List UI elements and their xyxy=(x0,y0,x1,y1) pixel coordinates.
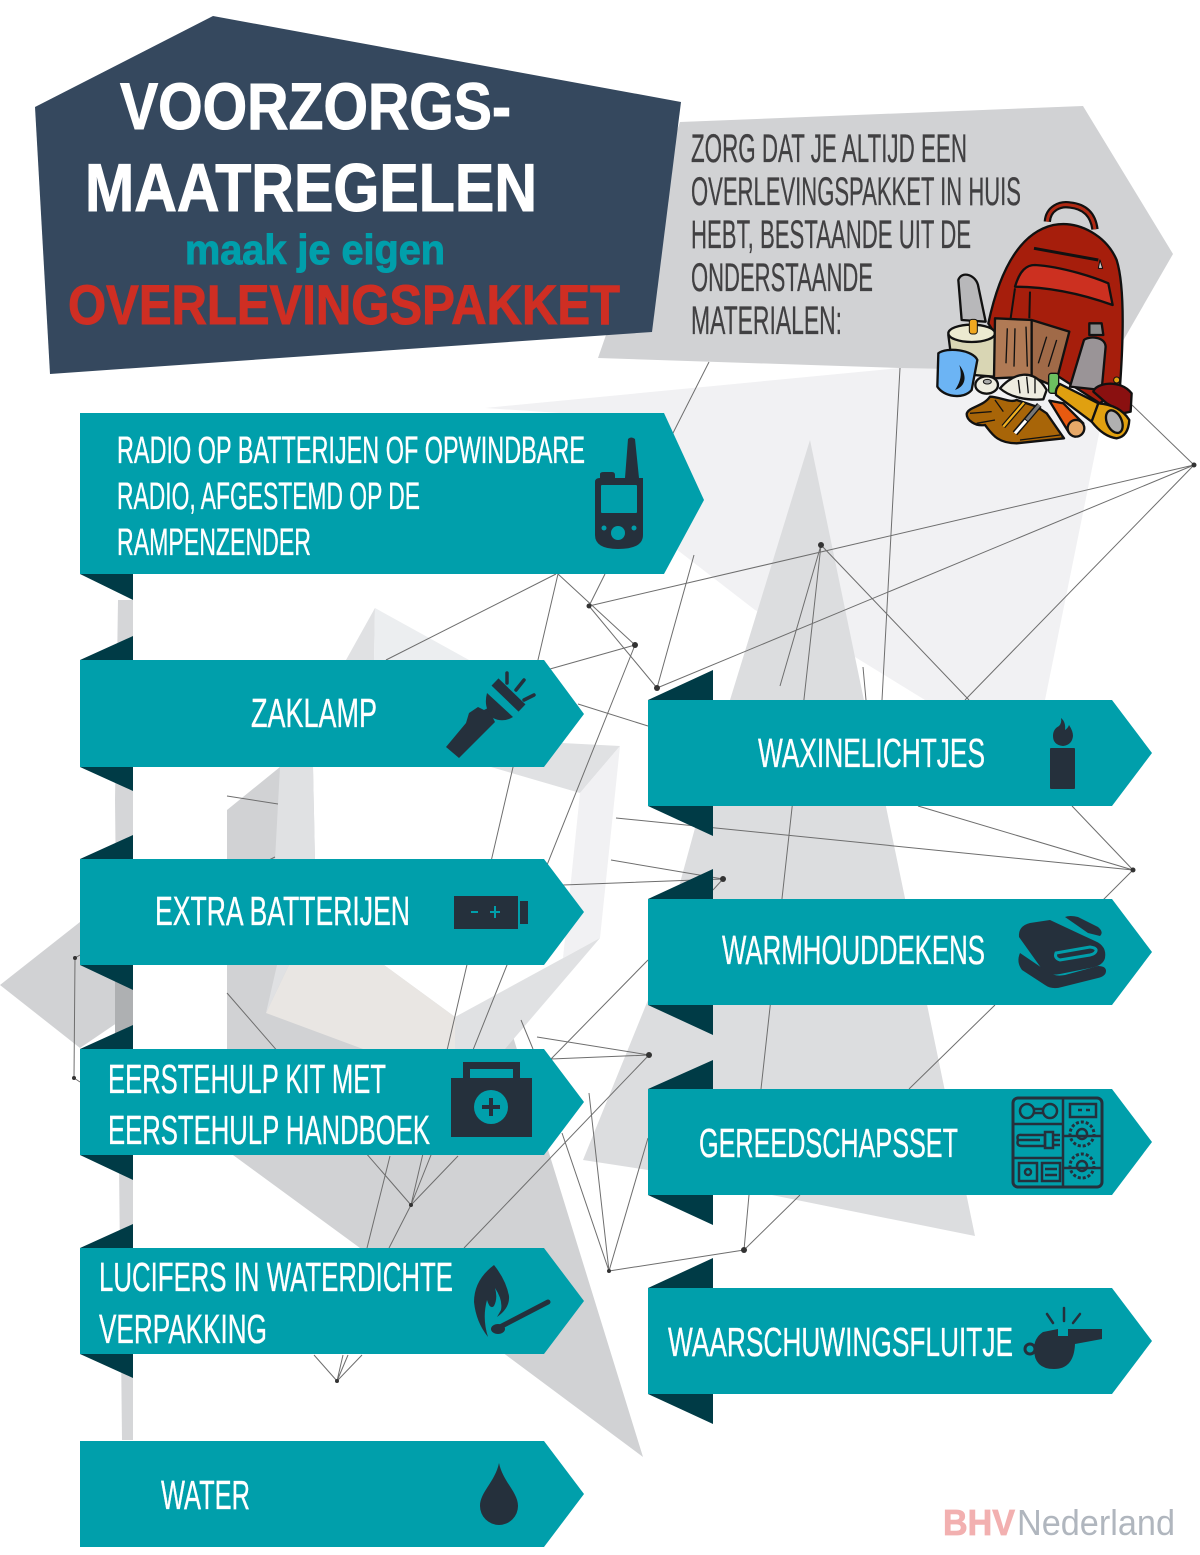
logo: BHV Nederland xyxy=(943,1502,1175,1543)
ribbon folds xyxy=(80,1224,133,1378)
intro text: ZORG DAT JE ALTIJD EEN xyxy=(691,127,967,171)
ribbon: warmhouddekens xyxy=(648,869,1152,1035)
icon: flashlight xyxy=(446,673,534,758)
background polygons xyxy=(0,368,1112,1457)
ribbon text: WAARSCHUWINGSFLUITJE xyxy=(668,1319,1013,1365)
icon: blankets xyxy=(1018,916,1106,988)
network lines xyxy=(74,362,1194,1381)
ribbon text: WARMHOUDDEKENS xyxy=(722,927,985,973)
ribbon folds xyxy=(648,869,713,1035)
ribbon body xyxy=(648,1288,1152,1394)
ribbon body xyxy=(80,859,584,965)
ribbon body xyxy=(648,1089,1152,1195)
ribbon text: ZAKLAMP xyxy=(251,690,377,736)
ribbon text: LUCIFERS IN WATERDICHTE xyxy=(99,1254,453,1300)
icon: whistle xyxy=(1025,1308,1102,1369)
ribbon folds xyxy=(648,1258,713,1424)
ribbon: lucifers xyxy=(80,1224,584,1378)
ribbon text: WAXINELICHTJES xyxy=(758,730,985,776)
title: OVERLEVINGSPAKKET xyxy=(68,273,620,336)
intro text: HEBT, BESTAANDE UIT DE xyxy=(691,213,971,257)
icon: water drop xyxy=(480,1463,518,1525)
intro text xyxy=(691,127,1021,343)
ribbon body xyxy=(648,700,1152,806)
ribbon body xyxy=(80,1049,584,1155)
ribbon text: WATER xyxy=(161,1472,250,1518)
panel: title xyxy=(35,16,681,374)
ribbon text: RAMPENZENDER xyxy=(117,522,311,564)
logo: BHV Nederland: BHV xyxy=(943,1502,1015,1543)
ribbon: waxinelichtjes xyxy=(648,670,1152,836)
ribbon body xyxy=(80,1248,584,1354)
ribbon text: GEREEDSCHAPSSET xyxy=(699,1120,958,1166)
ribbon folds xyxy=(648,1060,713,1225)
network nodes xyxy=(72,462,1196,1383)
ribbon folds xyxy=(80,1025,133,1180)
ribbon text xyxy=(108,1056,430,1153)
ribbon: eerstehulp xyxy=(80,1025,584,1180)
ribbon body xyxy=(80,1441,584,1547)
ribbon text: RADIO, AFGESTEMD OP DE xyxy=(117,476,420,518)
icon: burning match xyxy=(474,1265,548,1337)
ribbon text xyxy=(99,1254,453,1352)
ribbon fold xyxy=(80,574,133,600)
icon: candle xyxy=(1050,718,1075,789)
ribbon folds xyxy=(80,835,133,990)
title: maak je eigen xyxy=(185,226,445,273)
icon: radio xyxy=(595,438,643,549)
intro text: ONDERSTAANDE xyxy=(691,256,873,300)
ribbon text: VERPAKKING xyxy=(99,1306,267,1352)
ribbon: water xyxy=(80,1441,584,1547)
title: VOORZORGS- xyxy=(120,69,511,143)
ribbon text: RADIO OP BATTERIJEN OF OPWINDBARE xyxy=(117,430,585,472)
ribbon body xyxy=(80,413,704,574)
icon: model kit tools xyxy=(1013,1098,1102,1187)
ribbon: extra batterijen xyxy=(80,835,584,990)
panel: intro xyxy=(598,106,1173,372)
ribbon: gereedschapsset xyxy=(648,1060,1152,1225)
title: MAATREGELEN xyxy=(85,150,537,226)
ribbon text: EERSTEHULP KIT MET xyxy=(108,1056,386,1102)
title xyxy=(68,69,620,336)
icon: backpack with supplies xyxy=(937,205,1132,443)
ribbon: waarschuwingsfluitje xyxy=(648,1258,1152,1424)
ribbon body xyxy=(80,660,584,767)
intro text: MATERIALEN: xyxy=(691,299,842,343)
ribbon: zaklamp xyxy=(80,636,584,791)
ribbon text: EXTRA BATTERIJEN xyxy=(155,888,410,934)
icon: battery xyxy=(454,896,528,929)
ribbon: radio xyxy=(80,413,704,600)
ribbon text: EERSTEHULP HANDBOEK xyxy=(108,1107,430,1153)
icon: first aid kit xyxy=(451,1062,532,1137)
ribbon folds xyxy=(80,636,133,791)
ribbon body xyxy=(648,899,1152,1005)
ribbon folds xyxy=(648,670,713,836)
logo: BHV Nederland: Nederland xyxy=(1017,1502,1175,1543)
ribbon text xyxy=(117,430,585,564)
